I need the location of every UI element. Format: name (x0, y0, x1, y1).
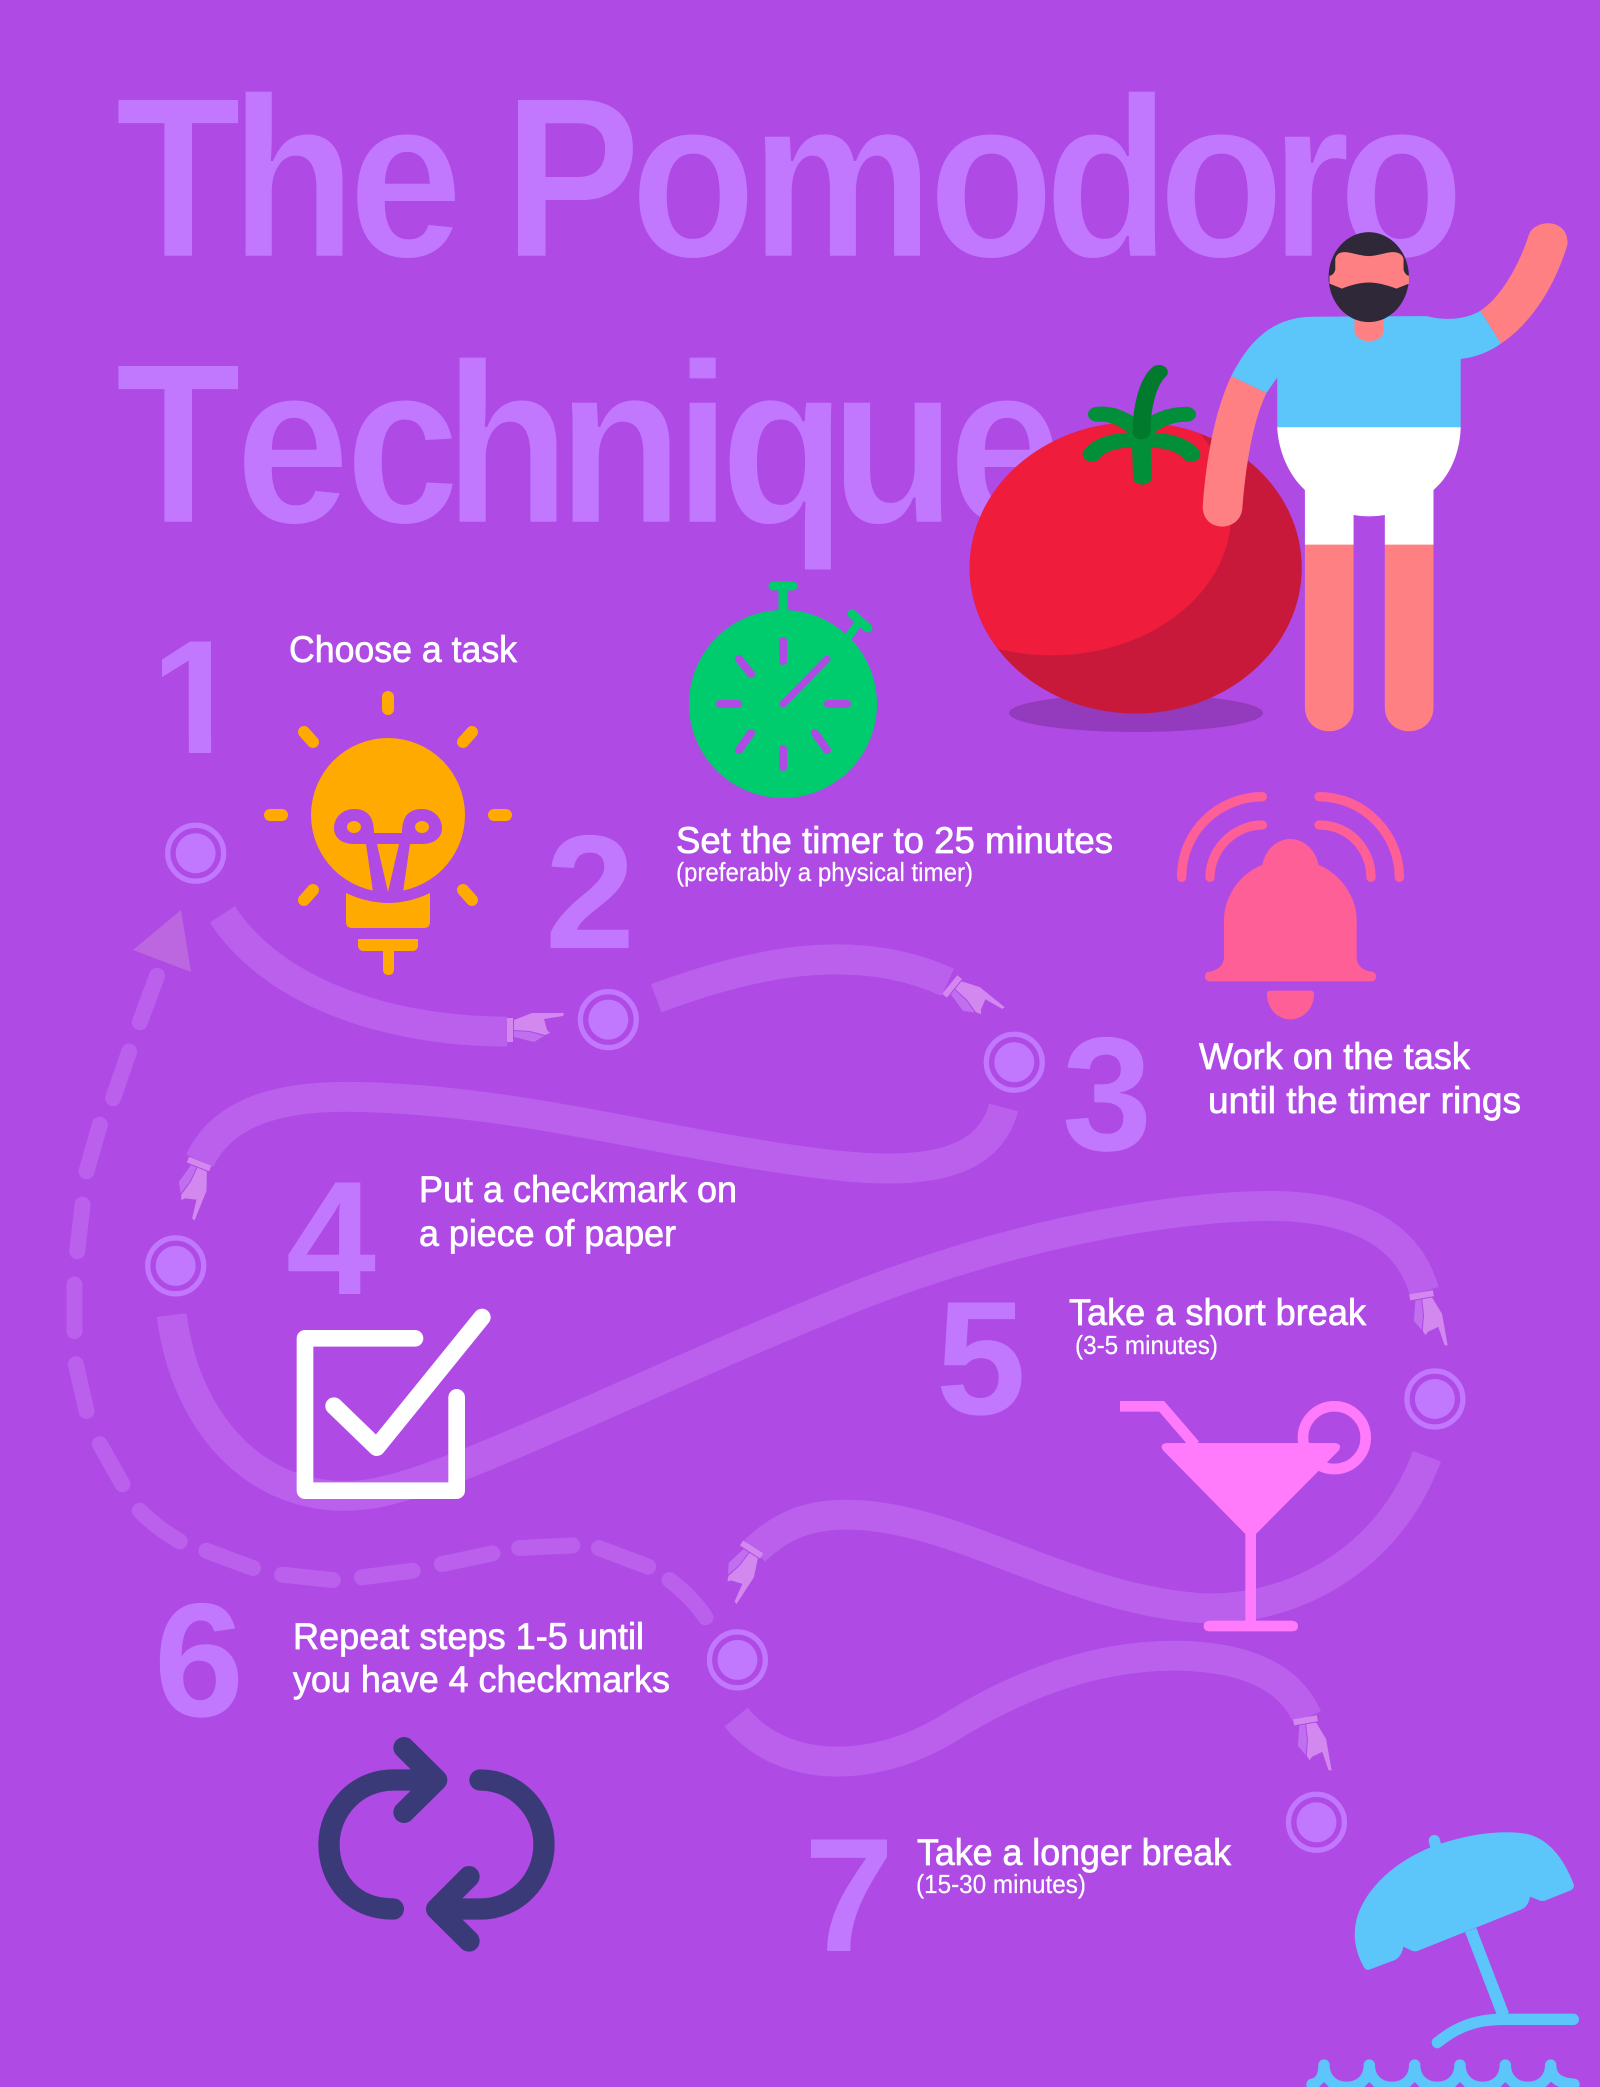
text: step 6 (293, 1616, 670, 1700)
text: step 7: Take a longer break (917, 1832, 1231, 1873)
icon: checkbox (305, 1317, 482, 1491)
text: step 5 (1069, 1292, 1366, 1360)
text: step 2 (676, 820, 1113, 887)
icon: repeat arrows (329, 1748, 544, 1941)
icon: light bulb (270, 697, 506, 975)
icon: beach umbrella and waves (1312, 1832, 1574, 2087)
step markers (148, 825, 1463, 1850)
number 5: 5 (936, 1268, 1026, 1449)
raised arm (1480, 223, 1568, 344)
man figure (1203, 223, 1568, 731)
text: step 6: you have 4 checkmarks (293, 1659, 670, 1700)
number 3: 3 (1062, 1004, 1152, 1185)
text: step 4: a piece of paper (419, 1213, 676, 1254)
head (1329, 232, 1409, 322)
icon: ringing bell (1182, 797, 1399, 1019)
neck (1354, 314, 1383, 341)
shorts (1277, 427, 1461, 545)
lowered arm (1203, 376, 1267, 527)
number 7: 7 (804, 1805, 894, 1986)
title (115, 50, 1464, 572)
text: step 7: (15-30 minutes) (916, 1869, 1086, 1899)
title: Technique (115, 316, 1063, 572)
text: step 2: Set the timer to 25 minutes (676, 820, 1113, 861)
dashed return path (75, 976, 705, 1617)
number 6: 6 (154, 1570, 244, 1751)
icon: cocktail glass (1120, 1406, 1366, 1631)
number 1 (162, 642, 212, 753)
number 4: 4 (286, 1148, 376, 1329)
title: The Pomodoro (115, 50, 1464, 306)
text: step 4 (419, 1169, 737, 1254)
legs (1305, 543, 1433, 731)
text: step 4: Put a checkmark on (419, 1169, 737, 1210)
shirt (1231, 311, 1501, 427)
text: step 3: Work on the task (1199, 1036, 1470, 1077)
text: step 6: Repeat steps 1-5 until (293, 1616, 644, 1657)
pointing hands (168, 971, 1448, 1776)
arrowhead of dashed path (133, 910, 191, 972)
icon: tomato (970, 365, 1302, 732)
number 1: 1 (151, 607, 241, 788)
text: step 5: (3-5 minutes) (1075, 1330, 1218, 1360)
icon: stopwatch (689, 586, 877, 798)
number 2: 2 (545, 802, 635, 983)
text: step 3 (1199, 1036, 1521, 1121)
text: step 5: Take a short break (1069, 1292, 1366, 1333)
text: step 1: Choose a task (289, 629, 517, 670)
winding path connecting the steps (172, 914, 1427, 1762)
text: step 7 (916, 1832, 1231, 1899)
text: step 3: until the timer rings (1208, 1080, 1521, 1121)
face (1329, 252, 1409, 289)
text: step 2: (preferably a physical timer) (676, 857, 973, 887)
